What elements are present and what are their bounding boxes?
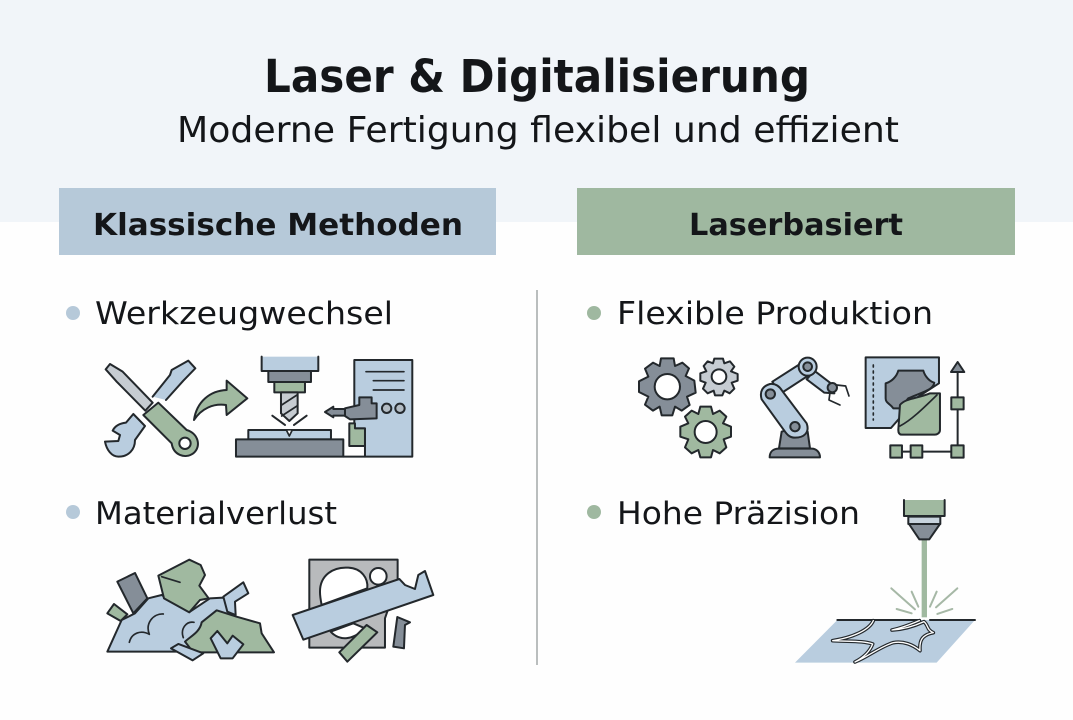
panel heading: Klassische Methoden bbox=[59, 188, 496, 255]
icon: flat blue scrap bbox=[171, 644, 203, 660]
icon: grey cut shape bbox=[886, 371, 934, 408]
icon: forearm bbox=[772, 364, 808, 394]
panel heading: Laserbasiert bbox=[577, 188, 1015, 255]
icon: laser head bbox=[904, 500, 945, 539]
subtitle: Moderne Fertigung flexibel und effizient bbox=[177, 110, 899, 151]
icon: laser cut sheet with vector path bbox=[866, 357, 964, 458]
icon: robot arm bbox=[761, 358, 849, 457]
icon: blue strip bbox=[223, 582, 248, 615]
icon: wrench bbox=[105, 414, 145, 457]
icon: green gear bbox=[680, 407, 731, 457]
icon: large grey gear bbox=[639, 358, 696, 415]
icon: green curved arrow bbox=[194, 381, 247, 420]
icon: workpiece on base bbox=[236, 430, 343, 457]
icon: blue sheet bbox=[866, 357, 939, 428]
icon: broken blue bar bbox=[293, 571, 433, 640]
icon: sparks bbox=[891, 588, 957, 614]
icon: elbow joint bbox=[799, 358, 817, 376]
icon: green bar bbox=[339, 625, 377, 662]
icon: milling spindle bbox=[262, 357, 318, 425]
icon: blue V scrap bbox=[211, 631, 243, 658]
list item: Flexible Produktion: Flexible Produktion bbox=[617, 296, 933, 332]
icon: vector axis with nodes bbox=[890, 362, 964, 458]
icon: small light gear bbox=[700, 359, 738, 395]
icon: grey plate bbox=[309, 560, 398, 648]
icon: blue sheet bbox=[795, 620, 975, 663]
icon: tools and milling machine bbox=[105, 357, 412, 457]
icon: pile creases bbox=[129, 614, 194, 642]
icon: small green scrap bbox=[107, 604, 127, 621]
icon: green pile bbox=[185, 610, 274, 652]
column divider bbox=[536, 290, 538, 665]
icon: cut crack outline bbox=[833, 621, 933, 662]
icon: grey scrap piece bbox=[117, 573, 147, 613]
icon: green cut shape bbox=[898, 393, 940, 435]
list item: Materialverlust: Materialverlust bbox=[95, 496, 337, 532]
title: Laser & Digitalisierung bbox=[264, 50, 810, 103]
icon: grey screwdriver shaft bbox=[106, 364, 153, 411]
icon: green handle bbox=[143, 403, 198, 456]
icon: grey shard bbox=[393, 617, 410, 648]
icon: gears bbox=[639, 358, 738, 457]
panel heading: Klassische Methoden: Klassische Methoden bbox=[93, 208, 463, 243]
icon: gripper bbox=[828, 383, 837, 392]
icon: blue pile bbox=[107, 595, 235, 652]
icon: cut crack gap bbox=[833, 621, 933, 662]
header band bbox=[0, 0, 1073, 222]
icon: control cabinet bbox=[325, 360, 412, 457]
icon: robot base bbox=[779, 427, 810, 448]
icon: laser cutting head and sheet bbox=[795, 500, 975, 663]
icon: scrap heap bbox=[107, 560, 274, 660]
icon: cut plate with offcuts bbox=[293, 560, 433, 662]
panel heading: Laserbasiert: Laserbasiert bbox=[689, 208, 903, 243]
icon: green rock top bbox=[158, 560, 209, 612]
list item: Werkzeugwechsel: Werkzeugwechsel bbox=[95, 296, 393, 332]
icon: lower arm bbox=[761, 384, 808, 438]
icon: blue screwdriver bbox=[153, 361, 195, 400]
list item: Hohe Präzision: Hohe Präzision bbox=[617, 496, 860, 532]
icon: laser beam bbox=[922, 540, 927, 617]
